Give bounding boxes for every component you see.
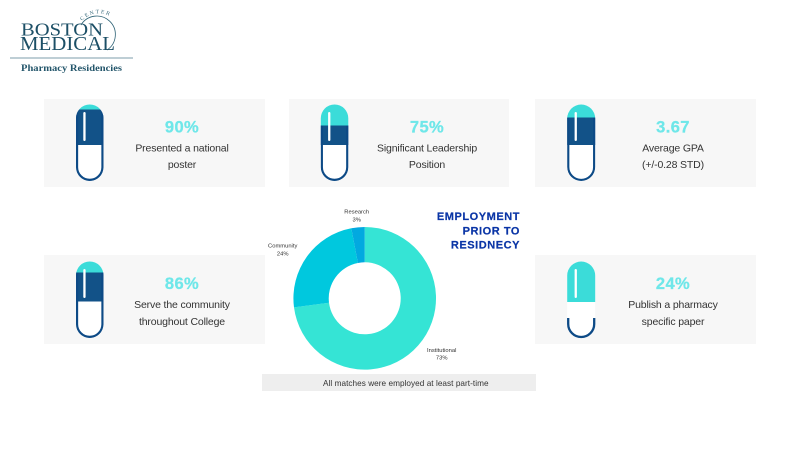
stat: 24% <box>656 275 690 293</box>
heading line 3: RESIDNECY <box>451 240 520 252</box>
description: Significant Leadership <box>377 142 477 154</box>
slice: institutional 73% <box>294 227 436 370</box>
icon: pill 86% <box>76 261 104 338</box>
panel: national poster <box>76 104 228 181</box>
description: Presented a national <box>135 142 229 154</box>
footnote bar <box>262 374 536 391</box>
description line 2: throughout College <box>139 316 225 328</box>
description: Average GPA <box>642 142 704 154</box>
logo subtitle: Pharmacy Residencies <box>21 64 122 74</box>
description line 2: Position <box>409 159 445 171</box>
description: Serve the community <box>134 299 231 311</box>
label: community value: 24% <box>277 251 289 257</box>
icon: pill 90% <box>76 104 104 181</box>
slice: community 24% <box>293 228 358 307</box>
label: institutional value: 73% <box>436 356 448 362</box>
logo <box>10 10 133 74</box>
icon: pill GPA <box>567 104 596 181</box>
icon: pill 24% <box>567 261 596 338</box>
description line 2: specific paper <box>642 316 705 328</box>
stat: 3.67 <box>656 118 690 136</box>
label: research value: 3% <box>353 217 361 223</box>
panel: community service <box>76 262 230 338</box>
slice: research 3% <box>351 227 365 263</box>
label: institutional: Institutional <box>427 348 456 354</box>
panel: leadership <box>320 104 477 181</box>
logo wordmark: BOSTON <box>21 20 103 40</box>
logo arc <box>81 16 115 50</box>
icon: pill 75% <box>320 104 349 181</box>
logo rule <box>10 58 133 59</box>
donut chart <box>268 209 456 373</box>
footnote text: All matches were employed at least part-time <box>323 379 489 388</box>
heading: EMPLOYMENT <box>437 211 520 223</box>
heading <box>437 211 520 252</box>
stat: 90% <box>165 118 199 136</box>
panel: GPA <box>567 104 704 181</box>
description line 2: poster <box>168 159 197 171</box>
logo wordmark second line: MEDICAL <box>20 33 115 55</box>
panel: publication <box>567 262 718 338</box>
logo center text: CENTER <box>80 10 110 20</box>
backing circle <box>290 223 440 373</box>
description line 2: (+/-0.28 STD) <box>642 159 704 171</box>
label: research: Research <box>344 209 369 215</box>
label: community: Community <box>268 244 297 250</box>
description: Publish a pharmacy <box>628 299 719 311</box>
stat: 86% <box>165 275 199 293</box>
stat: 75% <box>410 118 444 136</box>
heading line 2: PRIOR TO <box>463 225 520 237</box>
